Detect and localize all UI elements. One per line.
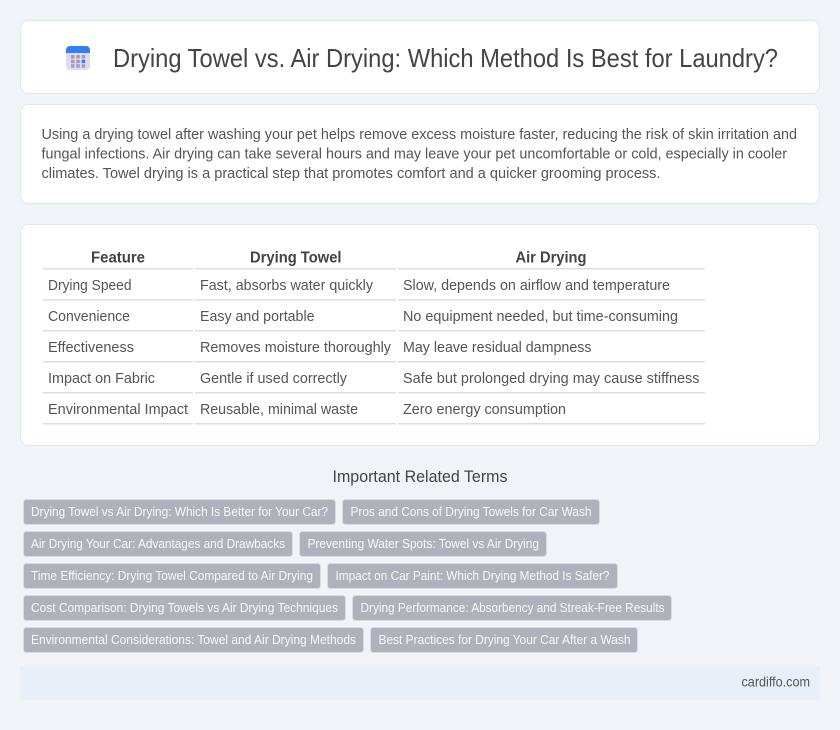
table row: convenience: Easy and portable	[200, 309, 314, 325]
table header	[91, 250, 586, 266]
text block: introduction paragraph: fungal infections. Air drying can take several hours and may leave your pet uncomfortable or cold, especially in cooler	[42, 146, 787, 162]
table row: effectiveness: Effectiveness	[48, 340, 134, 356]
icon: calendar	[66, 46, 90, 70]
table row: convenience	[48, 309, 678, 325]
table row: environmental impact: Reusable, minimal waste	[200, 402, 358, 418]
table header: Drying Towel	[250, 250, 342, 266]
table row: impact on fabric: Impact on Fabric	[48, 371, 155, 387]
text block: introduction paragraph	[42, 126, 797, 182]
table row: convenience: No equipment needed, but time-consuming	[403, 309, 678, 325]
table row: effectiveness: Removes moisture thoroughly	[200, 340, 392, 356]
table header: Feature	[91, 250, 145, 266]
tag: Cost Comparison: Drying Towels vs Air Drying Techniques	[31, 601, 338, 615]
table row: drying speed: Fast, absorbs water quickly	[200, 278, 374, 294]
table row: effectiveness	[48, 340, 592, 356]
tag	[24, 500, 336, 524]
footer: cardiffo.com	[742, 674, 810, 690]
table row: impact on fabric: Safe but prolonged drying may cause stiffness	[403, 371, 700, 387]
footer	[20, 666, 820, 700]
tag: Time Efficiency: Drying Towel Compared to Air Drying	[31, 569, 313, 583]
tag: Air Drying Your Car: Advantages and Drawbacks	[31, 537, 285, 551]
tag: Environmental Considerations: Towel and Air Drying Methods	[31, 633, 356, 647]
panel: introduction	[20, 104, 820, 204]
tag	[24, 532, 292, 556]
table row: impact on fabric	[48, 371, 700, 387]
table row: drying speed: Drying Speed	[48, 278, 132, 294]
text block: introduction paragraph: Using a drying towel after washing your pet helps remove excess moisture faster, reducing the risk of skin irritation and	[42, 126, 797, 143]
tag: Best Practices for Drying Your Car After a Wash	[378, 633, 631, 647]
tag	[24, 628, 364, 652]
table row: convenience: Convenience	[48, 309, 130, 325]
title: Drying Towel vs. Air Drying: Which Method Is Best for Laundry?	[113, 43, 778, 73]
tag: Drying Performance: Absorbency and Streak-Free Results	[360, 601, 664, 615]
tag: Drying Towel vs Air Drying: Which Is Better for Your Car?	[31, 505, 328, 519]
tag: Pros and Cons of Drying Towels for Car Wash	[350, 505, 592, 519]
table row: environmental impact: Zero energy consumption	[403, 402, 566, 418]
table row: drying speed	[48, 278, 670, 294]
tag: Preventing Water Spots: Towel vs Air Drying	[308, 537, 539, 551]
tag	[352, 596, 672, 620]
table row: environmental impact	[48, 402, 566, 418]
tag: Impact on Car Paint: Which Drying Method Is Safer?	[336, 569, 610, 583]
heading: important related terms: Important Related Terms	[332, 468, 508, 486]
table header: Air Drying	[516, 250, 586, 266]
panel: title card	[20, 20, 820, 94]
table row: environmental impact: Environmental Impact	[48, 402, 188, 418]
tag	[24, 564, 320, 588]
tag	[328, 564, 618, 588]
table row: impact on fabric: Gentle if used correctly	[200, 371, 348, 387]
text block: introduction paragraph: climates. Towel drying is a practical step that promotes comfort and a quicker grooming process.	[42, 165, 660, 182]
tag	[24, 596, 346, 620]
table row: drying speed: Slow, depends on airflow and temperature	[403, 278, 670, 294]
tag	[342, 500, 600, 524]
tag	[300, 532, 546, 556]
tag	[370, 628, 638, 652]
table row: effectiveness: May leave residual dampness	[403, 340, 592, 356]
panel: comparison table	[20, 224, 820, 446]
